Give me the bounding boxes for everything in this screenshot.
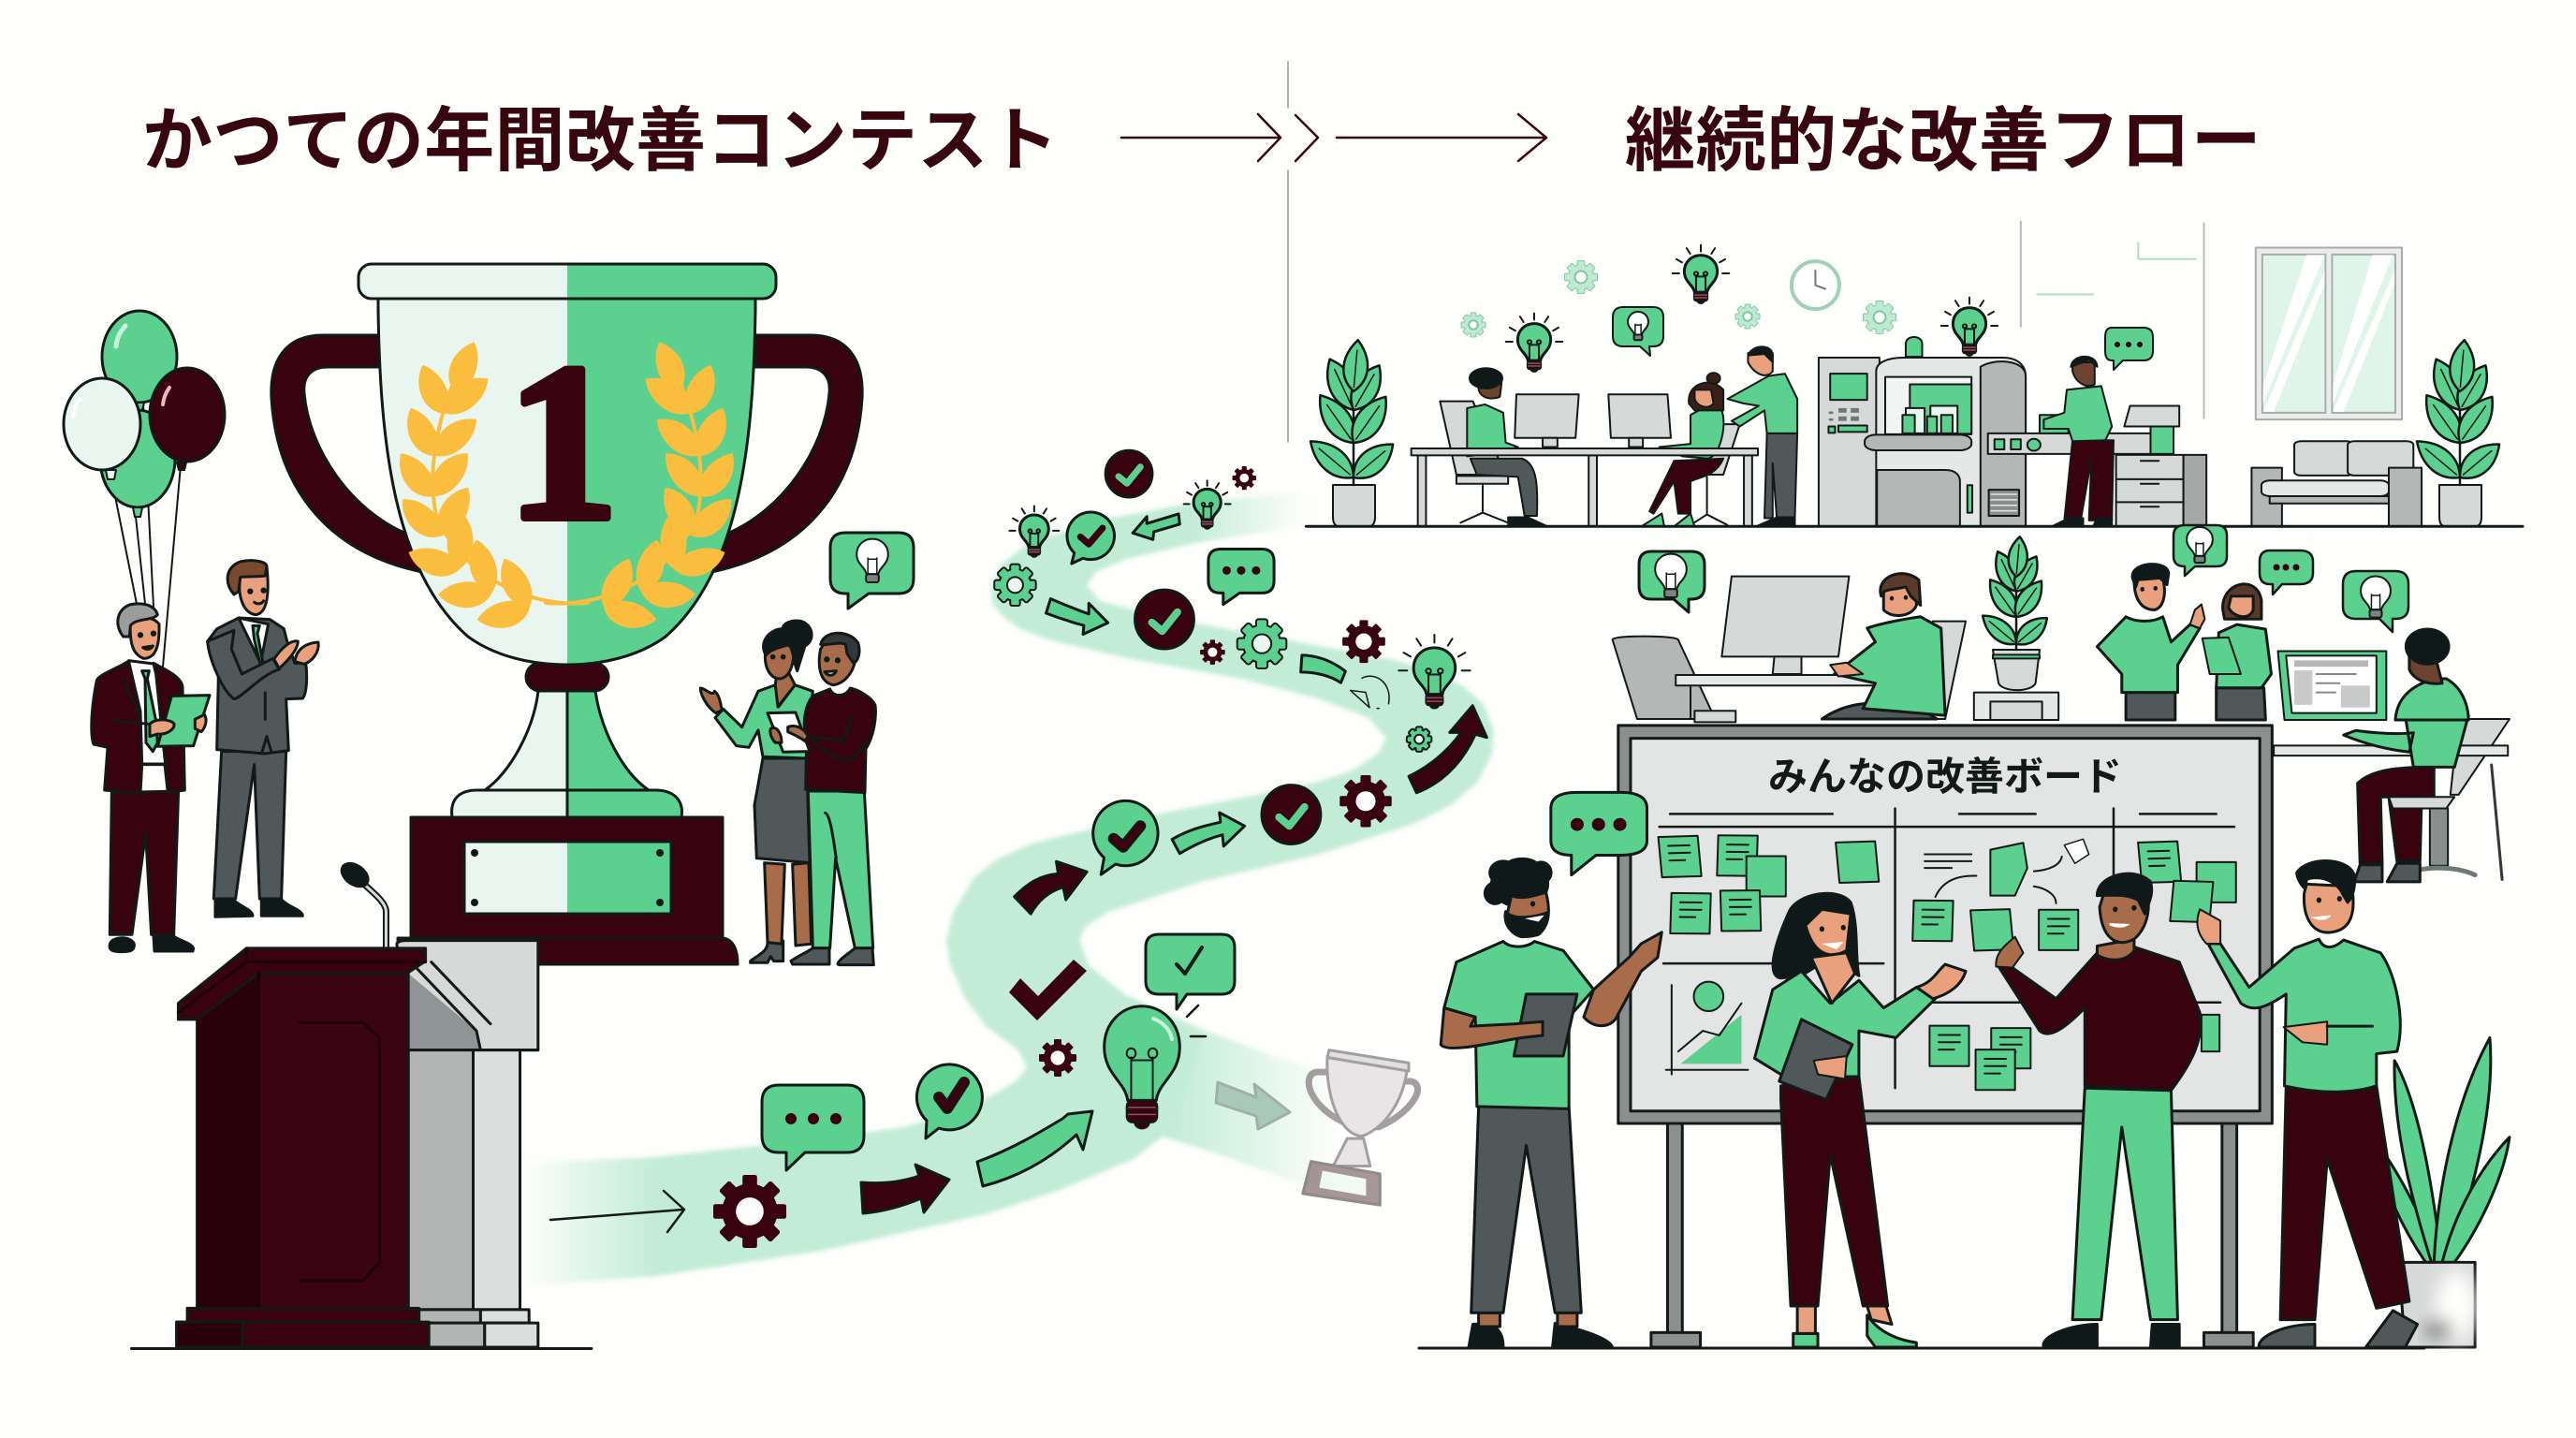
trophy handles: [271, 335, 862, 573]
speech bubble: idea: [1613, 307, 1663, 356]
team member: bearded man: [1441, 792, 1661, 1347]
upper path icons: [995, 450, 1486, 914]
couple with tablet: [700, 621, 875, 965]
check bubble: [1067, 512, 1115, 564]
balloons: [64, 311, 225, 667]
green arrow: [977, 1111, 1092, 1186]
plant right: [2409, 339, 2507, 527]
green gear: [1238, 620, 1285, 668]
title: continuous flow: 継続的な改善フロー: [1625, 101, 2261, 180]
team member: woman: [1754, 893, 1966, 1347]
board frame: [1618, 726, 2272, 1123]
speech bubble: dots: [1208, 549, 1274, 605]
cabinet: [1974, 693, 2058, 720]
board floor line: [1419, 1346, 2424, 1350]
gear: [1339, 775, 1392, 828]
team member: pointing man: [2197, 861, 2418, 1347]
thin arrow: [550, 1191, 684, 1232]
bottom plant: [2377, 1037, 2510, 1347]
talking man: [2097, 565, 2204, 720]
trophy: [271, 264, 862, 964]
center sketch note: [1925, 839, 2089, 903]
plant left: [1303, 339, 1400, 527]
wall clock: [1792, 261, 1839, 309]
title: annual contest: かつての年間改善コンテスト: [142, 101, 1059, 180]
idea bubbles: [1639, 525, 2408, 632]
speech bubble: idea: [830, 533, 914, 609]
speech bubble: check: [1146, 934, 1235, 1009]
standing man: [1728, 346, 1797, 526]
floating bulbs and gears: [1462, 245, 1998, 372]
laurel wreath: [389, 337, 744, 634]
team member: maroon sweater man: [1996, 873, 2201, 1347]
header divider and arrows: [1121, 62, 1546, 442]
gear: [1233, 466, 1256, 490]
board title: みんなの改善ボード: [1768, 755, 2122, 799]
green arrow: [1133, 514, 1179, 539]
desk monitor: [1676, 577, 1902, 719]
clapping man: [208, 561, 318, 917]
ribbon arrow: [1301, 655, 1345, 682]
check badge: [1135, 590, 1193, 649]
desk top: [1412, 448, 1758, 455]
plant pot: [1993, 650, 2040, 690]
trophy base: [398, 817, 738, 964]
improvement board: [1618, 726, 2272, 1347]
podium front: [177, 948, 429, 1347]
number one: 1: [506, 317, 619, 566]
speech bubble: dots: [2105, 328, 2153, 370]
podium side: [397, 941, 538, 1347]
bulb: [1009, 506, 1059, 557]
desk worker: [1822, 574, 1966, 719]
green arrow: [1172, 813, 1245, 854]
large bulb: [1105, 1005, 1206, 1128]
green monitor: [2278, 652, 2386, 720]
green arrow: [1046, 599, 1108, 634]
corner smudge: [2423, 1270, 2477, 1342]
sofa: [2251, 441, 2422, 526]
lower path icons: [550, 934, 1290, 1248]
desk with monitors: [1418, 394, 1752, 526]
faded arrow: [1216, 1082, 1290, 1129]
improvement path band: [505, 482, 1494, 1301]
sketch arrow: [1351, 676, 1389, 709]
seated man: [1440, 368, 1547, 526]
desk plant: [1977, 536, 2053, 651]
microphone: [337, 861, 386, 947]
factory office scene: [1303, 245, 2507, 527]
small gear: [1039, 1039, 1076, 1077]
dark rising arrow: [1409, 706, 1486, 793]
operator: [2043, 357, 2114, 526]
podium: [131, 861, 592, 1348]
large check: [1009, 960, 1087, 1020]
check badge: [1262, 785, 1321, 844]
empty chair: [1613, 637, 1735, 722]
dark arrow: [1015, 861, 1087, 914]
board office scene: [1613, 574, 2058, 722]
green gear: [1408, 727, 1430, 751]
check badge: [1105, 450, 1152, 497]
seated man at right desk: [2274, 715, 2510, 882]
bulb: [1184, 480, 1231, 529]
window: [2256, 247, 2402, 419]
presenter with folder: [92, 604, 210, 952]
gear: [1342, 620, 1385, 663]
bulb: [1398, 635, 1471, 709]
production machine: [1819, 337, 2206, 526]
woman with tablet: [2203, 584, 2271, 720]
gear: [713, 1175, 786, 1248]
check bubble: [916, 1064, 982, 1138]
growth chart: [1666, 982, 1748, 1075]
faded small trophy: [1303, 1050, 1418, 1205]
seated woman: [1641, 373, 1740, 526]
ground line: [1306, 525, 2523, 528]
speech bubble: dots: [762, 1085, 864, 1170]
maroon arrow: [861, 1165, 949, 1213]
board stands: [1651, 1123, 2253, 1347]
green gear: [995, 565, 1035, 605]
wall lines: [2021, 222, 2204, 418]
trophy cup: [359, 264, 776, 665]
trophy stem: [452, 663, 681, 817]
sticky notes: [1659, 835, 2236, 1090]
check bubble: [1093, 800, 1158, 874]
board grid: [1660, 809, 2234, 1088]
small gear: [1200, 639, 1225, 665]
